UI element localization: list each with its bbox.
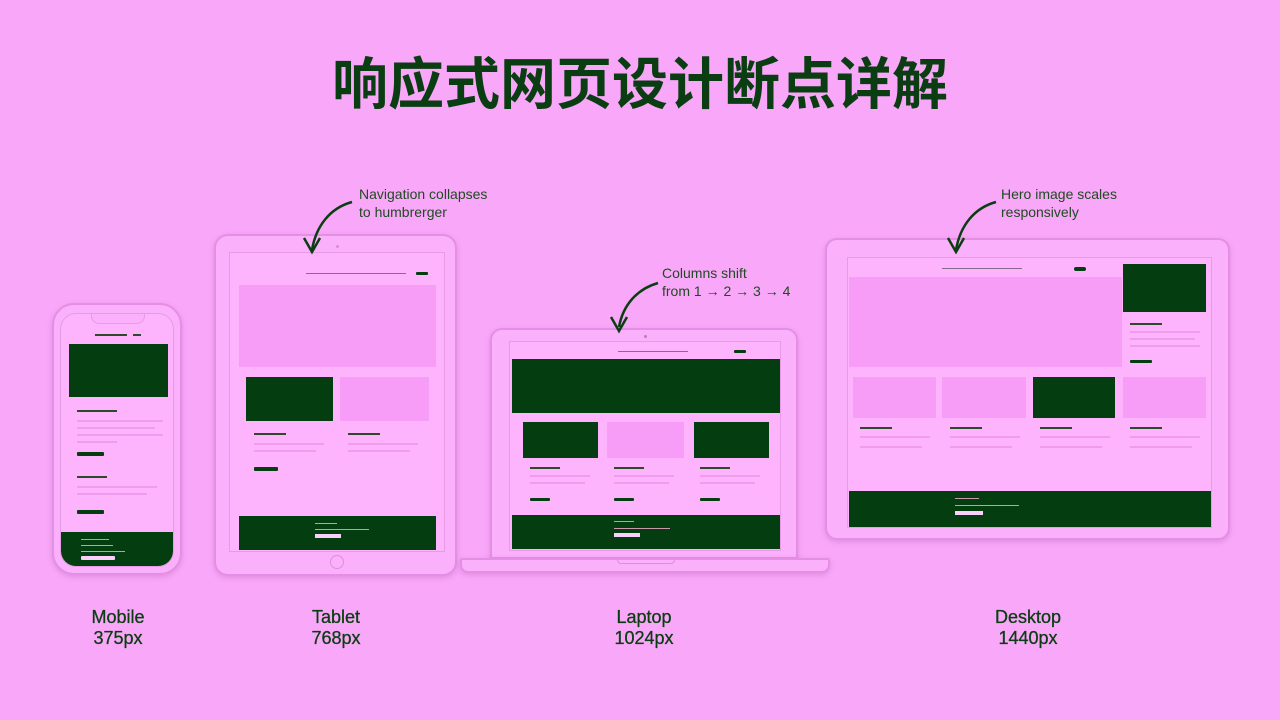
annotation: navigation: to humbrerger — [359, 204, 447, 220]
annotation: columns: from 1 → 2 → 3 → 4 — [662, 283, 790, 299]
annotation: navigation — [359, 186, 487, 220]
device: tablet — [214, 234, 457, 576]
annotation: columns: Columns shift — [662, 265, 747, 281]
label: desktop: 1440px — [998, 628, 1058, 648]
desktop hero — [849, 277, 1122, 367]
title: 响应式网页设计断点详解 — [332, 53, 948, 116]
desktop cards — [853, 377, 936, 418]
arrow: hero — [947, 200, 996, 254]
tablet cards — [246, 377, 333, 421]
desktop footer — [849, 491, 1211, 527]
laptop cards — [523, 422, 598, 458]
annotation: hero: responsively — [1001, 204, 1079, 220]
arrow: navigation — [303, 200, 352, 254]
label: mobile: 375px — [93, 628, 143, 648]
device: desktop — [825, 238, 1230, 540]
mobile hero — [69, 344, 168, 397]
device: laptop — [458, 328, 832, 577]
annotation: hero: Hero image scales — [1001, 186, 1117, 202]
label: laptop: Laptop — [616, 607, 672, 627]
label: mobile: Mobile — [91, 607, 145, 627]
annotation: navigation: Navigation collapses — [359, 186, 487, 202]
tablet home button — [330, 555, 344, 569]
annotation: columns — [662, 265, 790, 299]
tablet hero — [239, 285, 436, 367]
label: tablet: Tablet — [312, 607, 360, 627]
laptop footer — [512, 515, 780, 549]
label: mobile — [91, 607, 145, 648]
label: laptop — [614, 607, 674, 648]
arrow: columns — [610, 282, 658, 334]
label: desktop: Desktop — [995, 607, 1061, 627]
laptop base — [460, 558, 830, 573]
label: tablet — [311, 607, 361, 648]
mobile footer — [61, 532, 175, 568]
laptop hero — [512, 359, 780, 413]
label: tablet: 768px — [311, 628, 361, 648]
annotation: hero — [1001, 186, 1117, 220]
device: mobile — [52, 303, 182, 575]
label: desktop — [995, 607, 1061, 648]
label: laptop: 1024px — [614, 628, 674, 648]
tablet footer — [239, 516, 436, 550]
